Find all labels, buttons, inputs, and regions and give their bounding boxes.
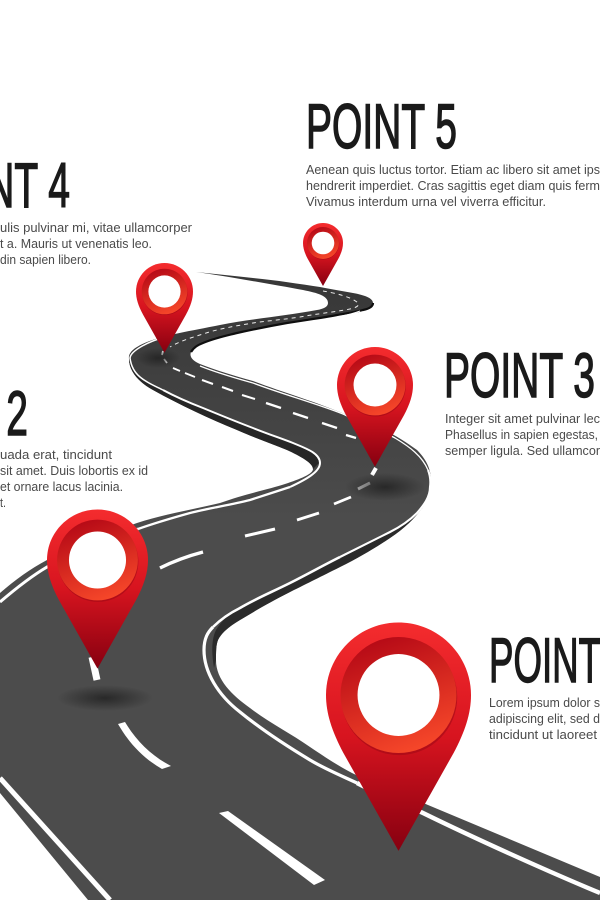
text: point 1: tincidunt ut laoreet xyxy=(489,727,597,742)
text: point 4: din sapien libero. xyxy=(0,252,91,267)
text: point 2: t. xyxy=(0,495,6,510)
block: point 4 xyxy=(0,151,193,267)
pin 4 xyxy=(136,263,193,353)
text: point 4 xyxy=(0,220,193,267)
road centre dashes xyxy=(92,291,376,885)
text: point 4: ulis pulvinar mi, vitae ullamcorper xyxy=(0,220,193,235)
road side strip: right bend xyxy=(212,480,431,668)
road side strip: mid bend xyxy=(191,303,373,352)
text: point 4: t a. Mauris ut venenatis leo. xyxy=(0,236,152,251)
text: point 2 xyxy=(0,447,148,510)
pin 2 xyxy=(47,510,148,669)
pin 5 xyxy=(303,223,343,286)
block: point 1 xyxy=(489,626,600,742)
pin 3 xyxy=(337,347,413,467)
block: point 3 xyxy=(444,341,600,458)
text: point 3 xyxy=(445,411,600,458)
pin shadows xyxy=(57,348,425,711)
text: point 2: et ornare lacus lacinia. xyxy=(0,479,123,494)
text: point 1 xyxy=(489,695,600,742)
road side strip: left bend xyxy=(129,358,319,469)
text: point 3: Integer sit amet pulvinar lec xyxy=(445,411,600,426)
text: point 5: Vivamus interdum urna vel viverra efficitur. xyxy=(306,194,546,209)
road xyxy=(0,272,600,900)
heading: point 5: POINT 5 xyxy=(306,92,457,162)
pin 1 xyxy=(326,622,471,851)
text: point 2: sit amet. Duis lobortis ex id xyxy=(0,463,148,478)
text: point 2: uada erat, tincidunt xyxy=(0,447,112,462)
road surface xyxy=(0,272,600,900)
block: point 5 xyxy=(306,92,600,209)
block: point 2 xyxy=(0,379,148,510)
road edge lines xyxy=(0,286,600,900)
text: point 5 xyxy=(306,162,600,209)
